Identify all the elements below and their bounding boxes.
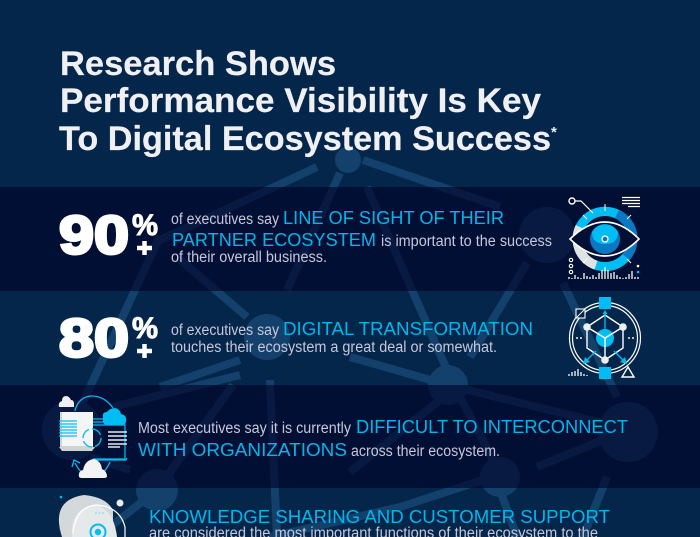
stat: 80%+: 80 (59, 308, 129, 368)
text block: line of sight: of their overall business. (171, 249, 327, 266)
panel: stat band 90% (0, 187, 700, 291)
text block: difficult to interconnect: WITH ORGANIZATIONS (138, 439, 347, 460)
text block: line of sight: LINE OF SIGHT OF THEIR (283, 207, 504, 228)
panel: interconnect band (0, 385, 700, 488)
text block: digital transformation (171, 318, 533, 356)
title (59, 45, 557, 158)
text block: line of sight: is important to the success (381, 233, 552, 250)
icon: hexagon network (569, 297, 640, 379)
title: To Digital Ecosystem Success (59, 120, 551, 158)
stat: 80%+ (59, 308, 158, 368)
icon: eye (569, 198, 640, 279)
title: * (551, 124, 557, 141)
text block: line of sight (171, 207, 552, 266)
text block: knowledge sharing: KNOWLEDGE SHARING AND CUSTOMER SUPPORT (149, 506, 610, 527)
text block: digital transformation: of executives say (171, 322, 279, 339)
stat: 90%+ (59, 206, 158, 266)
text block: line of sight: of executives say (171, 211, 279, 228)
text block: digital transformation: DIGITAL TRANSFORMATION (283, 318, 533, 339)
text block: knowledge sharing (149, 506, 610, 537)
text block: difficult to interconnect: DIFFICULT TO INTERCONNECT (356, 416, 628, 437)
text block: difficult to interconnect (138, 416, 628, 460)
text block: line of sight: PARTNER ECOSYSTEM (172, 229, 376, 250)
title: Research Shows (60, 45, 336, 83)
stat: 90%+: % (132, 209, 158, 242)
icon: cloud and documents (59, 396, 127, 478)
stat: 90%+: 90 (59, 206, 129, 266)
text block: difficult to interconnect: across their ecosystem. (351, 443, 500, 460)
title: Performance Visibility Is Key (60, 82, 541, 120)
text block: digital transformation: touches their ecosystem a great deal or somewhat. (171, 339, 497, 356)
stat: 80%+: % (132, 312, 158, 345)
background network graphic (42, 147, 658, 537)
text block: difficult to interconnect: Most executives say it is currently (138, 420, 351, 437)
icon: head with target (59, 495, 125, 537)
